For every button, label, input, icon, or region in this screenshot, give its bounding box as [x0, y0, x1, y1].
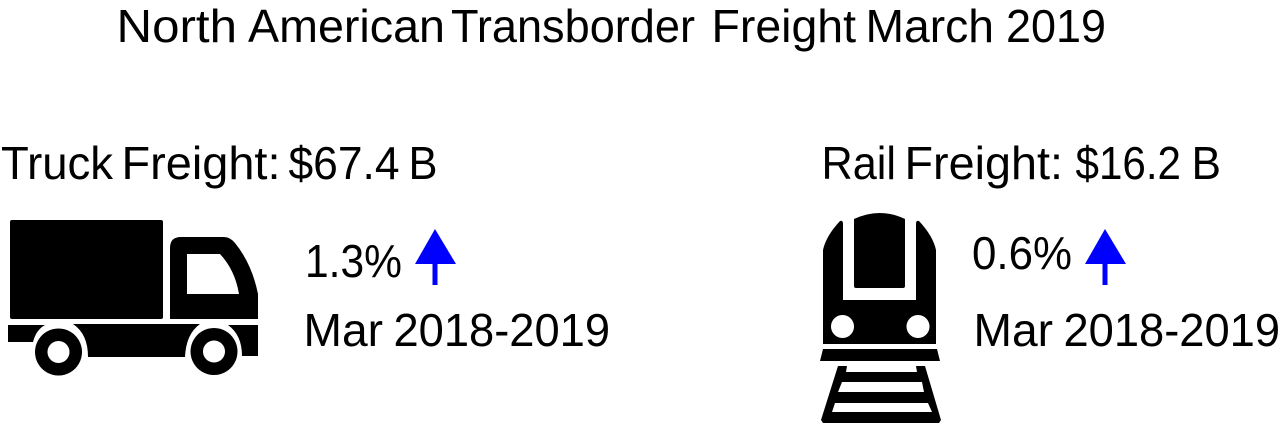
- title: American: [248, 0, 445, 52]
- title: 2019: [1006, 0, 1106, 52]
- period: truck: 2018-2019: [394, 304, 610, 356]
- title: [116, 0, 1106, 52]
- change: rail percent: 0.6%: [972, 227, 1072, 279]
- period: truck: Mar: [304, 304, 383, 356]
- icon: up arrow: [415, 229, 456, 285]
- panel: truck freight: [1, 137, 610, 375]
- heading: rail freight value: Freight:: [904, 137, 1063, 189]
- panel: rail freight: [820, 137, 1280, 423]
- heading: rail freight value: Rail: [822, 137, 896, 189]
- title: Transborder: [451, 0, 695, 52]
- change: truck percent: 1.3%: [305, 235, 402, 287]
- heading: rail freight value: [822, 137, 1221, 189]
- heading: truck freight value: $67.4: [288, 137, 400, 189]
- period: rail: Mar: [974, 304, 1053, 356]
- title: March: [866, 0, 994, 52]
- heading: truck freight value: B: [408, 137, 438, 189]
- icon: truck: [8, 220, 258, 375]
- heading: truck freight value: [1, 137, 438, 189]
- period: truck: [304, 304, 610, 356]
- heading: rail freight value: B: [1192, 137, 1221, 189]
- heading: truck freight value: Freight:: [122, 137, 280, 189]
- period: rail: 2018-2019: [1064, 304, 1280, 356]
- icon: train: [820, 213, 941, 423]
- icon: up arrow: [1085, 229, 1126, 285]
- heading: truck freight value: Truck: [1, 137, 114, 189]
- heading: rail freight value: $16.2: [1076, 137, 1181, 189]
- title: North: [116, 0, 237, 52]
- title: Freight: [712, 0, 856, 52]
